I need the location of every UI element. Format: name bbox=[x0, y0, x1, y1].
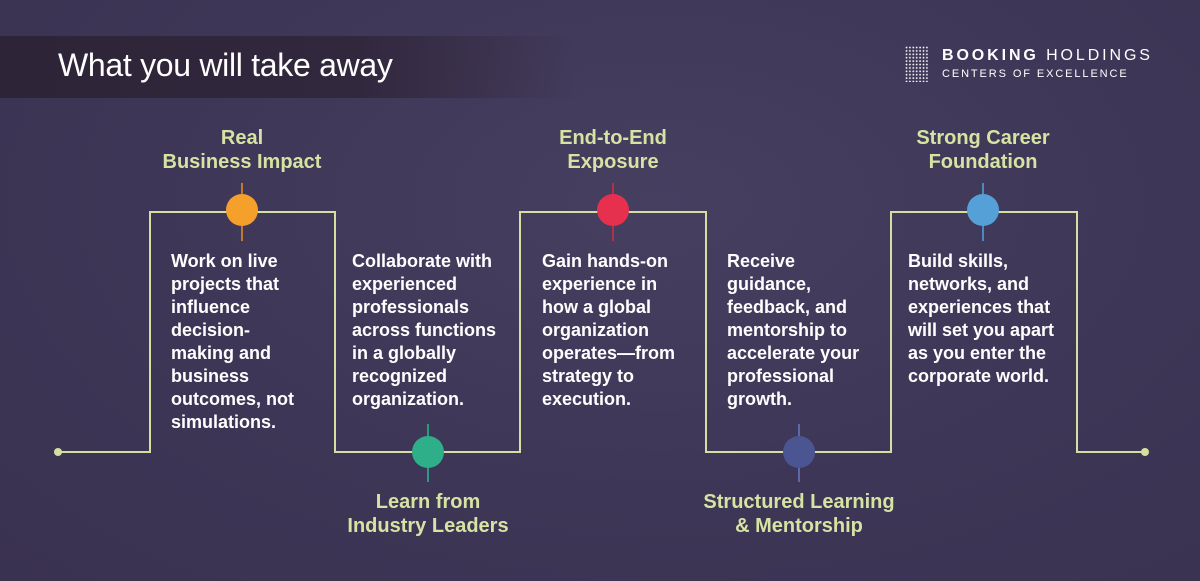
text 5: as you enter the bbox=[908, 343, 1046, 363]
text 1 bbox=[171, 251, 294, 432]
text 5: networks, and bbox=[908, 274, 1029, 294]
heading: Strong Career Foundation: Strong Career bbox=[916, 127, 1050, 149]
logo bbox=[906, 46, 1153, 82]
text 3 bbox=[542, 251, 675, 409]
text 1: outcomes, not bbox=[171, 389, 294, 409]
heading: Structured Learning: Structured Learning bbox=[703, 491, 895, 513]
heading: End-to-End Exposure bbox=[559, 127, 667, 173]
text 3: how a global bbox=[542, 297, 651, 317]
icon: orange node bbox=[226, 183, 258, 241]
text 4: growth. bbox=[727, 389, 792, 409]
icon: green node bbox=[412, 424, 444, 482]
text 2: professionals bbox=[352, 297, 469, 317]
text 2: organization. bbox=[352, 389, 464, 409]
logo: BOOKING HOLDINGS bbox=[942, 47, 1153, 64]
text 3: Gain hands-on bbox=[542, 251, 668, 271]
text 4: accelerate your bbox=[727, 343, 859, 363]
text 4: feedback, and bbox=[727, 297, 847, 317]
logo: CENTERS OF EXCELLENCE bbox=[942, 68, 1129, 80]
text 5 bbox=[908, 251, 1054, 386]
heading: Real Business Impact bbox=[163, 127, 322, 173]
text 4: guidance, bbox=[727, 274, 811, 294]
text 5: Build skills, bbox=[908, 251, 1008, 271]
text 1: simulations. bbox=[171, 412, 276, 432]
heading: Real Business Impact: Real bbox=[221, 127, 263, 149]
text 1: making and bbox=[171, 343, 271, 363]
text 4: professional bbox=[727, 366, 834, 386]
icon: navy node bbox=[783, 424, 815, 482]
text 1: projects that bbox=[171, 274, 279, 294]
text 1: influence bbox=[171, 297, 250, 317]
heading: Strong Career Foundation: Foundation bbox=[929, 151, 1037, 173]
text 2: experienced bbox=[352, 274, 457, 294]
text 3: operates—from bbox=[542, 343, 675, 363]
text 3: strategy to bbox=[542, 366, 634, 386]
heading: Strong Career Foundation bbox=[916, 127, 1050, 173]
heading: Learn from Industry Leaders bbox=[347, 491, 509, 537]
text 3: experience in bbox=[542, 274, 657, 294]
heading: End-to-End Exposure: Exposure bbox=[567, 151, 659, 173]
heading: End-to-End Exposure: End-to-End bbox=[559, 127, 667, 149]
text 2: across functions bbox=[352, 320, 496, 340]
text 3: organization bbox=[542, 320, 649, 340]
text 5: experiences that bbox=[908, 297, 1050, 317]
text 1: decision- bbox=[171, 320, 250, 340]
icon: red node bbox=[597, 183, 629, 241]
heading: Learn from Industry Leaders: Learn from bbox=[376, 491, 480, 513]
text 4: Receive bbox=[727, 251, 795, 271]
text 4 bbox=[727, 251, 859, 409]
heading: Structured Learning bbox=[703, 491, 895, 537]
text 2 bbox=[352, 251, 496, 409]
title: What you will take away bbox=[58, 47, 393, 83]
text 2: in a globally bbox=[352, 343, 456, 363]
heading: Structured Learning: & Mentorship bbox=[735, 515, 863, 537]
text 2: recognized bbox=[352, 366, 447, 386]
heading: Learn from Industry Leaders: Industry Leaders bbox=[347, 515, 509, 537]
text 5: corporate world. bbox=[908, 366, 1049, 386]
text 1: Work on live bbox=[171, 251, 278, 271]
text 3: execution. bbox=[542, 389, 631, 409]
text 4: mentorship to bbox=[727, 320, 847, 340]
text 5: will set you apart bbox=[908, 320, 1054, 340]
icon: blue node bbox=[967, 183, 999, 241]
text 1: business bbox=[171, 366, 249, 386]
heading: Real Business Impact: Business Impact bbox=[163, 151, 321, 173]
text 2: Collaborate with bbox=[352, 251, 492, 271]
